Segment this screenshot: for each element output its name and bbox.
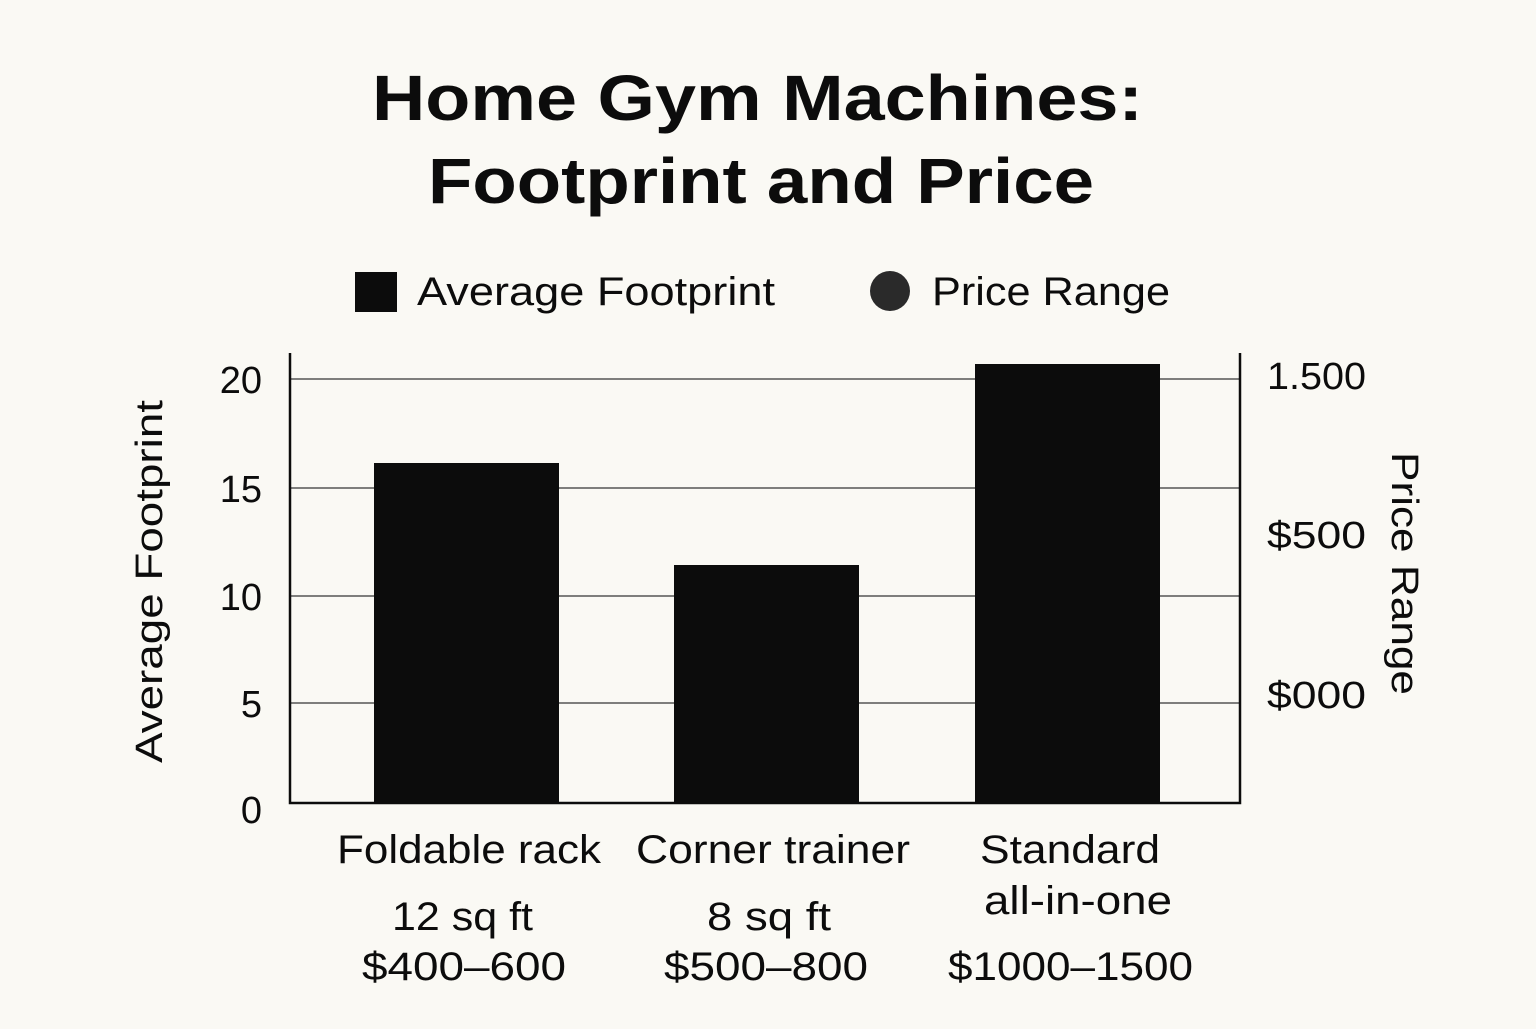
left axis labels: 0: [241, 790, 262, 832]
left axis title: Average Footprint: [129, 399, 171, 763]
title: [372, 62, 1143, 217]
category labels: [337, 828, 1193, 989]
right axis labels: [1267, 356, 1366, 717]
category labels: Foldable rack: [337, 828, 602, 872]
legend: [355, 270, 1170, 314]
right axis labels: 1.500: [1267, 356, 1366, 398]
right axis labels: $000: [1267, 675, 1366, 717]
title: Footprint and Price: [428, 145, 1094, 217]
right axis labels: $500: [1267, 515, 1366, 557]
legend: Price Range: [932, 270, 1170, 314]
category labels: Corner trainer: [636, 828, 910, 872]
title: Home Gym Machines:: [372, 62, 1143, 134]
legend: Average Footprint: [417, 270, 775, 314]
left axis labels: 15: [220, 469, 262, 511]
category labels: 8 sq ft: [707, 895, 831, 939]
category labels: $1000–1500: [948, 945, 1193, 989]
category labels: Standard: [980, 828, 1160, 872]
left axis labels: 5: [241, 684, 262, 726]
axes: [290, 353, 1240, 803]
left axis labels: 20: [220, 360, 262, 402]
gridlines: [290, 379, 1240, 703]
left axis labels: 10: [220, 577, 262, 619]
category labels: $400–600: [362, 945, 566, 989]
category labels: all-in-one: [984, 879, 1172, 923]
category labels: $500–800: [664, 945, 868, 989]
category labels: 12 sq ft: [392, 895, 533, 939]
right axis title: Price Range: [1383, 452, 1425, 695]
left axis labels: [220, 360, 262, 832]
bar chart: [374, 364, 1160, 803]
